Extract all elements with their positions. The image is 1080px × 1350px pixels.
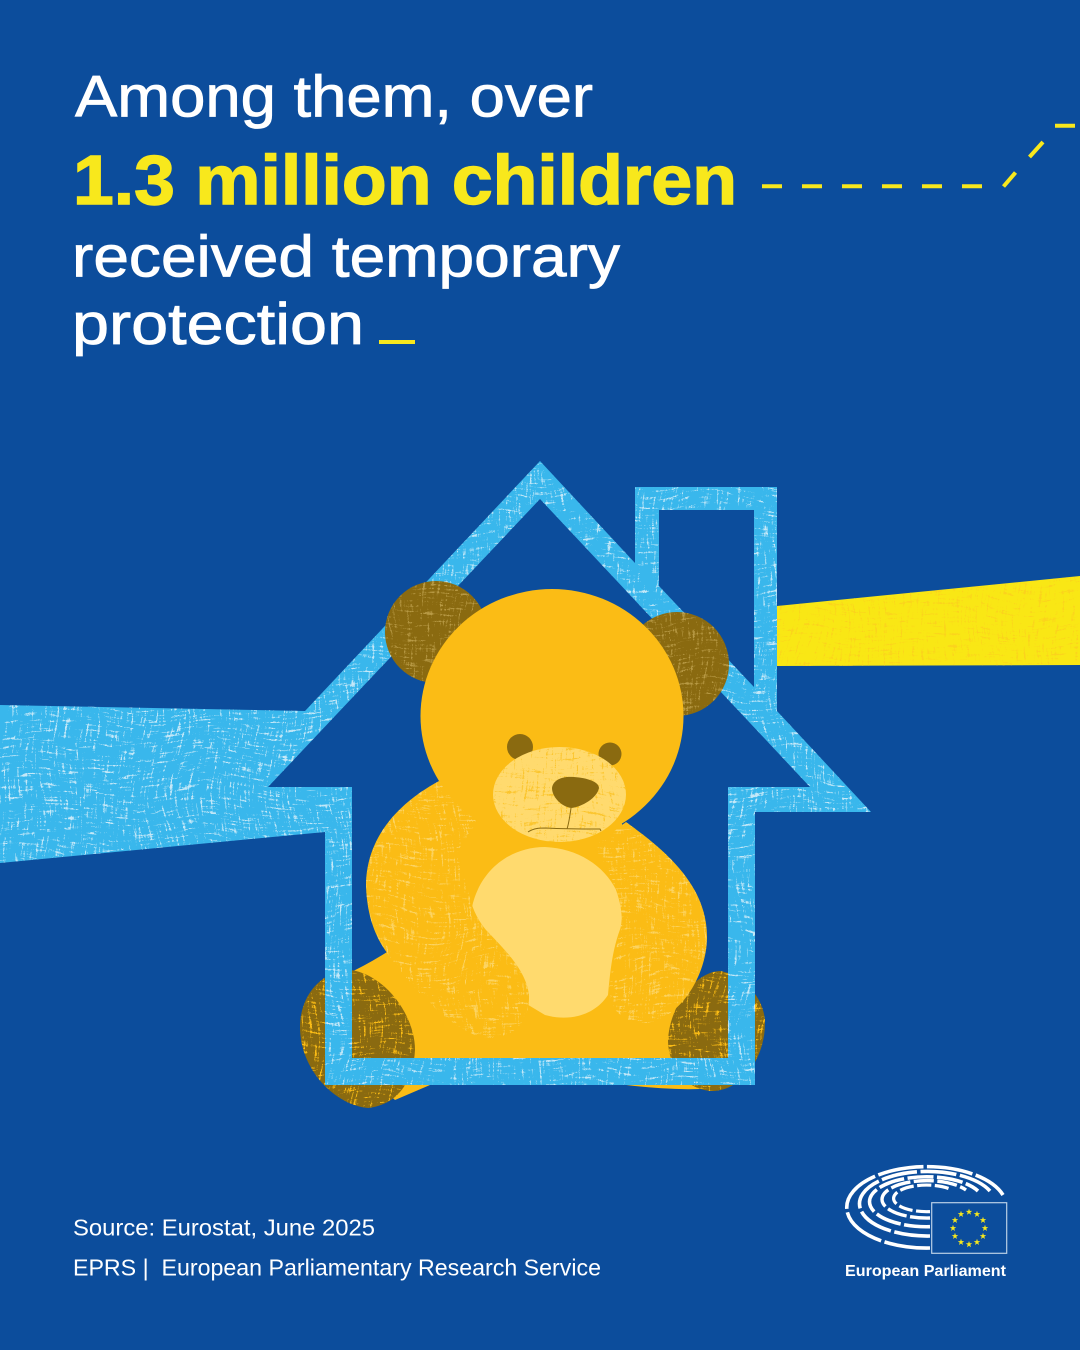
- nose: [552, 777, 599, 808]
- body: [340, 780, 700, 1100]
- right ear: [625, 612, 729, 716]
- muzzle: [493, 747, 626, 842]
- yellow underscore accent: [379, 340, 415, 344]
- teddy bear: [300, 581, 765, 1108]
- EPRS credit: EPRS | European Parliamentary Research Service: [73, 1254, 601, 1280]
- heading line: received temporary: received temporary: [72, 224, 620, 290]
- left arm: [366, 781, 529, 1038]
- left ear: [385, 581, 487, 683]
- head: [420, 589, 684, 843]
- heading line: Among them, over: Among them, over: [75, 64, 593, 130]
- left eye: [507, 734, 533, 760]
- dashed yellow line: [762, 126, 1075, 186]
- EU flag: [932, 1203, 1007, 1253]
- right arm: [594, 822, 707, 1023]
- source text: Source: Eurostat, June 2025: [73, 1214, 375, 1240]
- belly: [472, 847, 624, 1018]
- logo wordmark: European Parliament: [845, 1263, 1007, 1280]
- left foot: [300, 970, 415, 1108]
- European Parliament logo: [845, 1167, 1007, 1280]
- mouth: [528, 808, 601, 832]
- right foot: [668, 971, 765, 1091]
- yellow beam right: [777, 576, 1080, 666]
- right eye: [598, 742, 622, 766]
- house walls in front of bear: [325, 800, 755, 1085]
- heading line: protection: protection: [72, 292, 364, 357]
- hemicycle arcs: [847, 1167, 1003, 1248]
- house with blue beam: [0, 461, 871, 1085]
- title: [72, 64, 737, 357]
- highlighted figure: 1.3 million children: 1.3 million children: [73, 141, 737, 219]
